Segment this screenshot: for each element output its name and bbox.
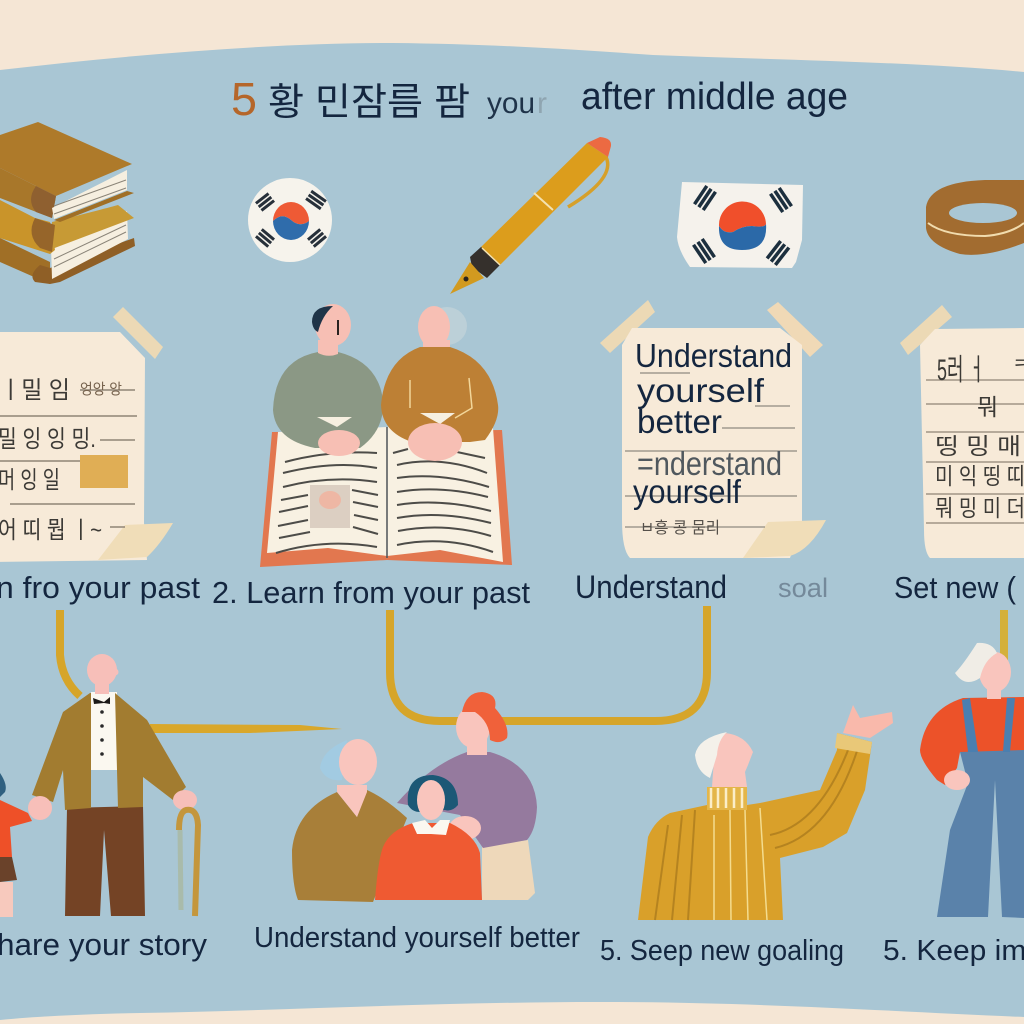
caption: share your story: hare your story (0, 927, 207, 962)
caption: 2 learn from your past: 2. Learn from your past (212, 575, 530, 610)
panel: note 1: 머 잉 일 (0, 467, 60, 494)
icon: stacked books (0, 122, 135, 284)
panel: note 3: better (637, 403, 722, 440)
panel: note 1: 어 띠 뭡 ㅣ~ (0, 517, 102, 544)
label row: lower captions (0, 922, 1024, 967)
caption: learn from your past (cropped): n fro your past (0, 570, 200, 605)
person: woman (381, 306, 498, 461)
grandfather shirt (91, 692, 117, 770)
panel: open book with couple (260, 304, 512, 567)
child (0, 773, 32, 917)
icon: fountain pen (450, 137, 611, 294)
open book (260, 427, 512, 567)
icon: Korean flag circle (248, 178, 332, 262)
panel: note 3: Understand (635, 337, 792, 374)
icon: ring (926, 180, 1024, 255)
panel: note 1: ㅣ밀 임 (0, 377, 70, 404)
caption: understand: Understand (575, 569, 727, 605)
person: man (273, 304, 383, 456)
left elder (292, 790, 407, 902)
connector lines (60, 606, 1004, 733)
panel: note 3: yourself (637, 372, 765, 409)
panel: note 3: ㅂ흥 콩 뭄리 (640, 519, 720, 537)
panel: note 1: 밀 잉 잉 밍. (0, 426, 96, 453)
title: 5 (231, 73, 257, 125)
panel: note 4 (900, 305, 1024, 558)
person: woman in overalls (920, 643, 1024, 918)
caption: set new: Set new ( (894, 570, 1017, 605)
label row: upper captions (0, 569, 1017, 610)
panel: note 4: 5러 ㅓ (937, 354, 985, 387)
grandfather jacket (32, 693, 186, 810)
panel: note 3 (600, 300, 826, 558)
title: after middle age (581, 76, 848, 118)
title (231, 73, 848, 125)
caption: soal: soal (778, 573, 828, 603)
icon: Korean flag (677, 182, 803, 268)
purple mother (482, 840, 535, 900)
grandfather pants (65, 806, 145, 916)
panel: note 3: yourself (633, 473, 742, 510)
title: you (487, 87, 535, 120)
group: family of three (292, 692, 537, 902)
title: 황 민잠름 팜 (268, 82, 470, 124)
caption: seep new goaling: 5. Seep new goaling (600, 935, 844, 967)
panel: note 1 (0, 307, 173, 562)
title: r (537, 87, 547, 120)
panel: note 4: 띵 밍 매 (935, 433, 1021, 459)
panel: note 4: 뭐 (977, 394, 998, 420)
red child (375, 823, 482, 900)
panel: note 3: =nderstand (637, 445, 782, 482)
person: man in yellow sweater (638, 705, 893, 920)
panel: note 1: 엉앙 앙 (80, 381, 122, 398)
caption: understand yourself better: Understand yourself better (254, 922, 580, 954)
person: grandfather with child (0, 654, 198, 917)
